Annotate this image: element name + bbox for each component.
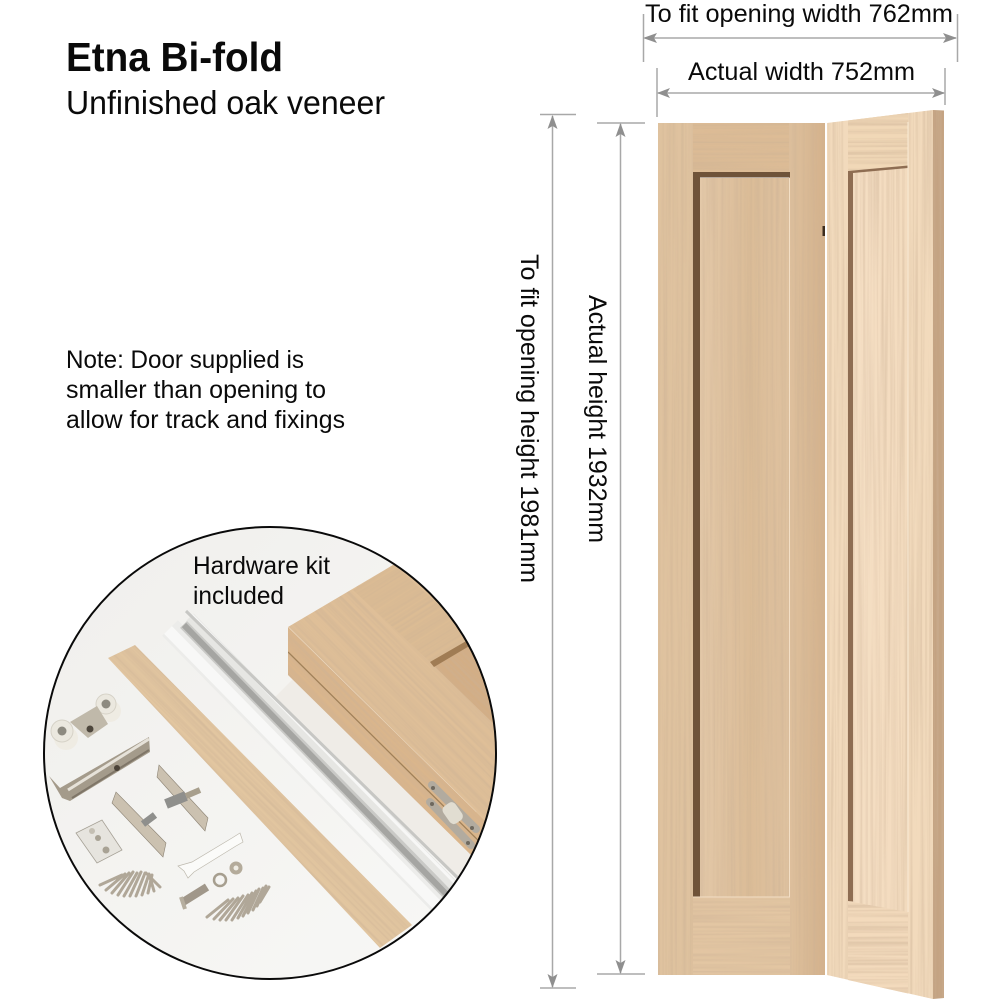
oak strip xyxy=(108,645,412,948)
upper rail xyxy=(378,565,456,646)
circle outline xyxy=(44,527,496,979)
bi-fold door illustration xyxy=(658,110,944,999)
right door leaf xyxy=(827,110,944,999)
door side face xyxy=(288,627,484,855)
spanner xyxy=(178,833,243,878)
left door leaf xyxy=(658,123,825,975)
screw group one xyxy=(100,872,160,896)
door top face xyxy=(288,565,495,820)
roller carriage xyxy=(51,694,121,750)
folded door sample xyxy=(288,565,495,855)
floor shadow under door xyxy=(288,684,478,872)
dimension: actual width 752mm xyxy=(657,58,945,117)
note text block: smaller than opening to xyxy=(66,376,326,404)
dimension: opening height 1981mm xyxy=(515,114,576,988)
folding hinge xyxy=(430,785,476,845)
recessed panel xyxy=(435,646,493,723)
note text block: Note: Door supplied is xyxy=(66,346,304,374)
title: Etna Bi-fold xyxy=(66,34,283,80)
dimension: opening width 762mm: To fit opening width 762mm xyxy=(645,0,953,28)
mounting clip xyxy=(76,820,122,863)
dimension: actual height 1932mm xyxy=(583,123,645,974)
dimension: opening width 762mm xyxy=(643,0,958,62)
nut and washer xyxy=(214,862,242,886)
note text block xyxy=(66,346,345,434)
dimension: actual height 1932mm: Actual height 1932mm xyxy=(583,295,611,543)
hardware kit label: Hardware kit xyxy=(193,552,330,580)
dimension: opening height 1981mm: To fit opening height 1981mm xyxy=(515,254,543,583)
pivot plate two xyxy=(157,765,208,831)
photo background xyxy=(44,527,496,979)
note text block: allow for track and fixings xyxy=(66,406,345,434)
pivot plate one xyxy=(112,792,166,857)
channel bracket xyxy=(49,737,150,801)
dimension: actual width 752mm: Actual width 752mm xyxy=(688,58,915,86)
subtitle: Unfinished oak veneer xyxy=(66,84,385,121)
hardware kit label xyxy=(193,552,330,610)
aluminium track xyxy=(168,611,466,908)
screw group two xyxy=(207,886,269,920)
bolt xyxy=(181,887,207,909)
hardware kit circular inset xyxy=(43,526,497,980)
hardware kit label: included xyxy=(193,582,284,610)
